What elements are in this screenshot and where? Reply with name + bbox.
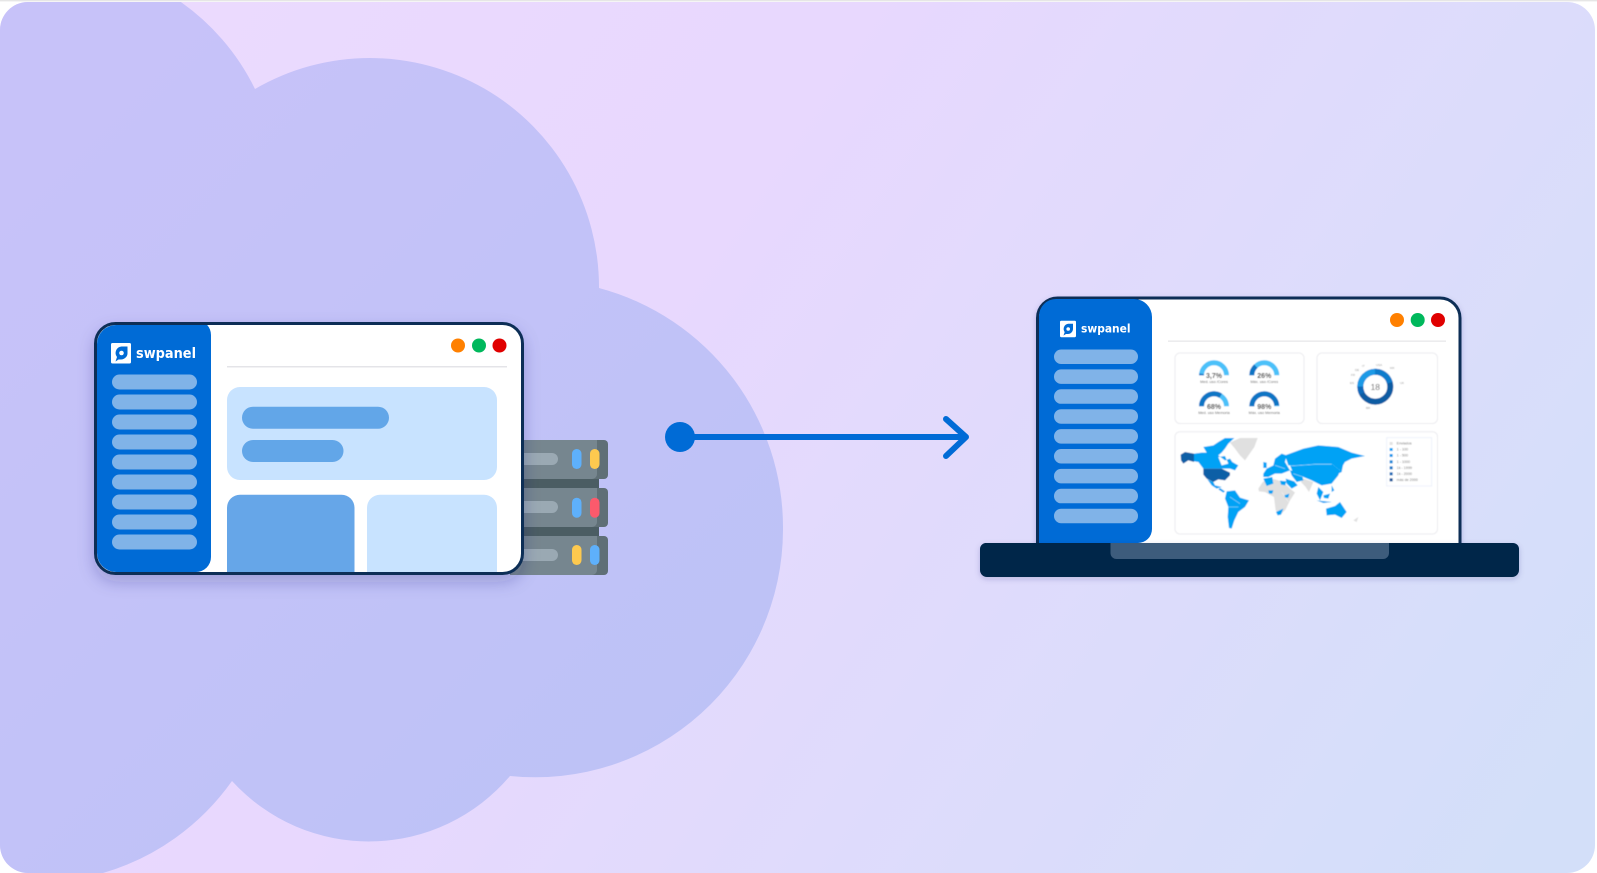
laptop trackpad notch [1110, 543, 1389, 559]
donut leader labels: USA [1376, 363, 1382, 367]
donut leader labels [1350, 363, 1404, 410]
arrow [665, 419, 966, 456]
unselected countries [1230, 438, 1358, 522]
gauge: max cores: 26% [1257, 373, 1272, 380]
bottom right block [367, 494, 497, 572]
server unit 1 [510, 440, 608, 479]
map legend: 1k - 1999 [1397, 466, 1412, 470]
server unit 2 [510, 488, 608, 527]
bottom left block [227, 494, 354, 572]
content panel [227, 387, 497, 480]
gauge: average memory [1198, 394, 1231, 415]
australia [1326, 502, 1347, 518]
short placeholder bar [242, 440, 344, 462]
gauge: max memory: 98% [1257, 404, 1272, 411]
donut leader labels: MX [1390, 366, 1394, 370]
central asia and china [1290, 464, 1340, 485]
server stack [510, 440, 608, 575]
gauge: max cores [1250, 363, 1278, 384]
highlighted countries [1194, 438, 1365, 529]
window controls [451, 338, 506, 352]
United States [1181, 452, 1230, 482]
donut chart [1360, 372, 1390, 402]
laptop window controls [1390, 313, 1445, 327]
donut leader labels: FR [1351, 373, 1356, 377]
southeast asia [1317, 464, 1343, 503]
middle east [1286, 470, 1303, 489]
map legend: 1 - 1000 [1397, 460, 1410, 464]
mexico and central america [1207, 479, 1225, 493]
map legend: 1 - 500 [1397, 454, 1408, 458]
window frame [96, 324, 522, 574]
dashboard content [1175, 353, 1438, 534]
world map panel [1175, 432, 1438, 534]
laptop base [980, 543, 1519, 577]
control panel window [90, 320, 522, 595]
gauge: average cores: Med. uso /Cores [1200, 380, 1228, 384]
laptop logo wordmark: swpanel [1081, 322, 1130, 336]
canada [1194, 438, 1238, 470]
map legend [1387, 438, 1432, 486]
gauge: average memory: 68% [1207, 404, 1222, 411]
gauge: max memory: Máx. uso Memoria [1249, 411, 1281, 415]
donut value: 18 [1371, 382, 1380, 392]
cloud shape [0, 0, 783, 873]
map legend: 1k - 2000 [1397, 472, 1412, 476]
map legend: Enviados [1397, 442, 1412, 446]
logo wordmark: swpanel [136, 346, 196, 362]
gauge: max cores: Máx. uso /Cores [1250, 380, 1278, 384]
long placeholder bar [242, 407, 389, 429]
africa countries [1263, 477, 1289, 515]
connectors [510, 479, 599, 536]
donut leader labels: DE [1355, 368, 1359, 372]
europe [1263, 454, 1290, 477]
russia [1285, 445, 1365, 470]
laptop [980, 298, 1519, 577]
laptop logo icon [1060, 321, 1076, 337]
gauge: average cores [1200, 363, 1228, 384]
donut leader labels: BR [1366, 406, 1371, 410]
donut leader labels: IT [1362, 364, 1365, 368]
laptop screen frame [1038, 298, 1460, 545]
donut leader labels: ES [1350, 381, 1354, 385]
logo icon [111, 343, 131, 364]
laptop sidebar [1039, 299, 1152, 545]
map legend: 1 - 100 [1397, 448, 1408, 452]
gauge: average cores: 3,7% [1206, 373, 1223, 380]
gauge: average memory: Med. uso Memoria [1198, 411, 1231, 415]
usage gauges panel [1175, 353, 1304, 424]
laptop menu items [1054, 350, 1138, 523]
window sidebar [90, 320, 211, 572]
donut leader labels: UK [1400, 381, 1404, 385]
map legend: más de 2000 [1397, 478, 1418, 482]
south america [1225, 490, 1249, 529]
world map [1181, 438, 1365, 529]
sidebar menu items [112, 374, 197, 550]
donut chart panel [1317, 353, 1438, 424]
gauge: max memory [1249, 394, 1281, 415]
server unit 3 [510, 536, 608, 575]
